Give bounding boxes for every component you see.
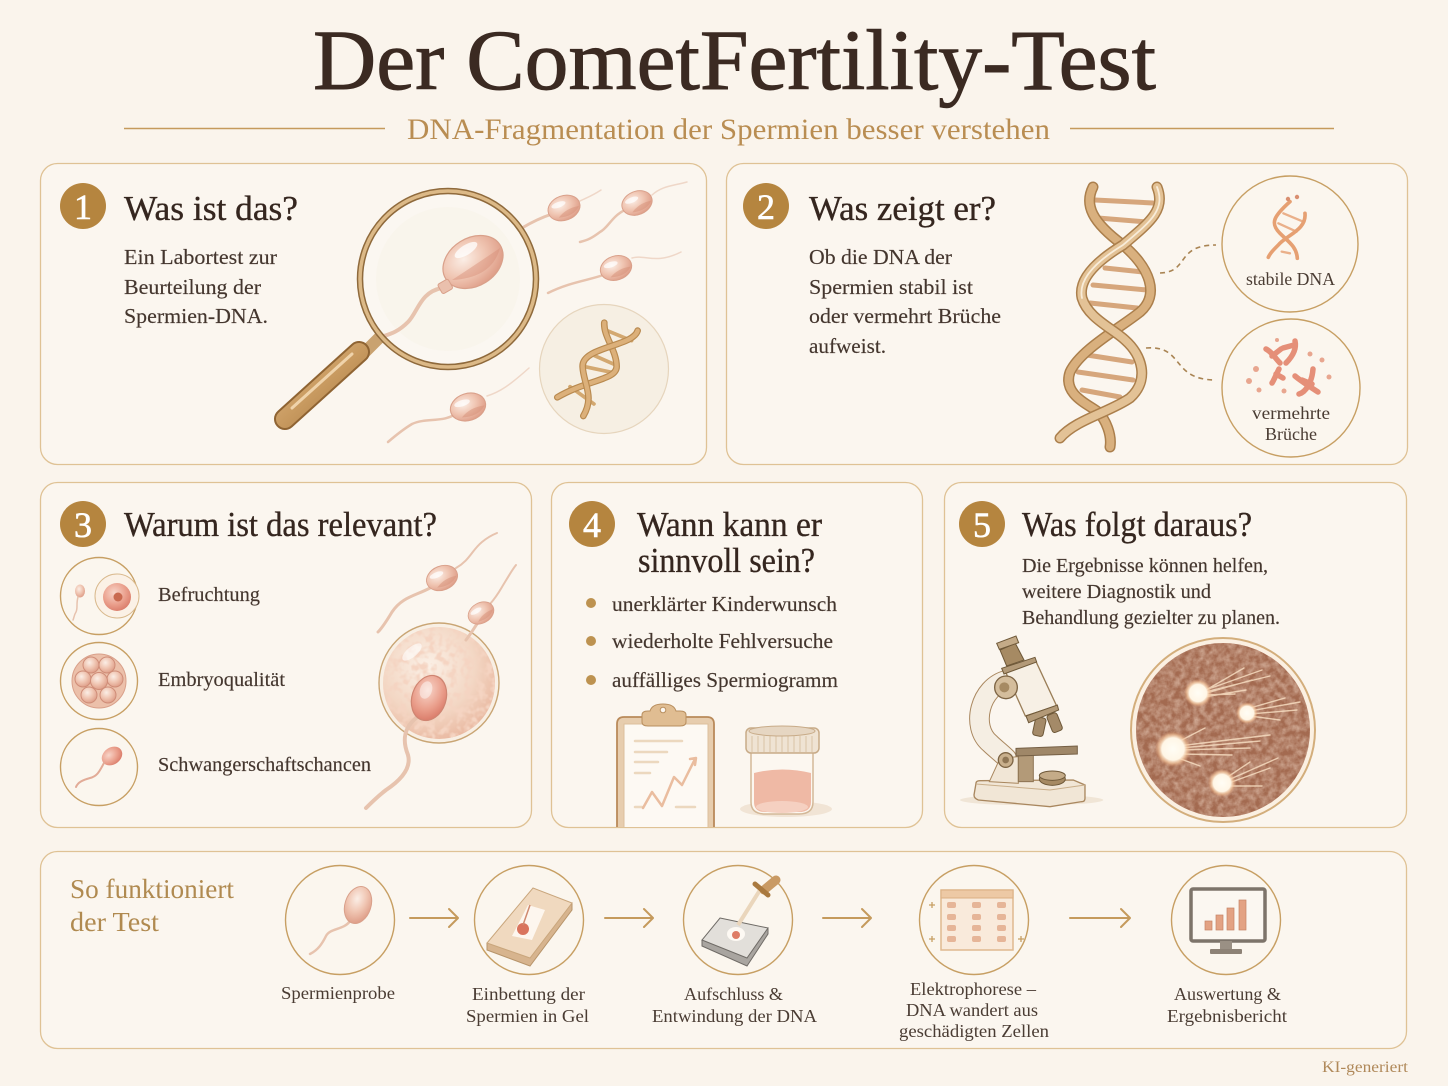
heading: So funktioniert der Test: So funktioniert [70,874,234,904]
step 5: Auswertung und Ergebnisbericht: Ergebnisbericht [1167,1006,1287,1026]
title: Der CometFertility-Test [313,12,1156,108]
step 4: Elektrophorese: DNA wandert aus [906,1000,1038,1020]
bullet list [586,592,838,692]
panel: Was folgt daraus? [944,482,1406,828]
body text 2: Spermien stabil ist [809,275,973,299]
number badge 2 [743,183,789,229]
step 3: Aufschluss und Entwindung der DNA [652,866,817,1026]
step 4: Elektrophorese: geschädigten Zellen [899,1021,1049,1041]
bullet list: wiederholte Fehlversuche [612,629,833,653]
number badge 3 [60,501,106,547]
heading 3: Warum ist das relevant? [124,505,437,544]
number badge 3: 3 [74,505,92,545]
body text 5: Die Ergebnisse können helfen, [1022,555,1268,577]
arrow 2 [605,909,653,927]
subtitle: DNA-Fragmentation der Spermien besser verstehen [407,113,1050,146]
panel: Was zeigt er? [726,164,1408,464]
label: Schwangerschaftschancen: Schwangerschaftschancen [158,754,371,776]
step 5: Auswertung und Ergebnisbericht: Auswertung & [1174,984,1281,1004]
connector: stabile DNA [1160,245,1216,273]
step 4: Elektrophorese [899,866,1049,1041]
body text 1: Beurteilung der [124,275,261,299]
number badge 1 [60,183,106,229]
icon: Schwangerschaftschancen [60,728,138,806]
number badge 2: 2 [757,187,775,227]
body text 1: Spermien-DNA. [124,304,268,328]
icon: Embryoqualität [60,642,138,720]
number badge 4: 4 [583,505,601,545]
body text 2 [809,245,1001,358]
icon: Befruchtung [60,558,139,634]
heading 1: Was ist das? [124,189,298,228]
bullet list: auffälliges Spermiogramm [612,668,838,692]
arrow 4 [1070,909,1130,927]
body text 1 [124,245,277,328]
icon: background sperm cells [388,182,687,442]
credit note: KI-generiert [1322,1059,1409,1076]
heading 2: Was zeigt er? [809,189,996,228]
heading 4 [637,505,822,580]
callout: vermehrte Brüche [1222,319,1360,457]
step 5: Auswertung und Ergebnisbericht [1167,866,1287,1026]
step 1: Spermienprobe [281,866,395,1003]
heading 5: Was folgt daraus? [1022,505,1252,544]
icon: comet assay microscope image [1131,638,1315,822]
body text 5: weitere Diagnostik und [1022,581,1211,603]
panel: Warum ist das relevant? [40,482,532,828]
step 2: Einbettung der Spermien in Gel [466,866,589,1026]
heading 4: Wann kann er [637,505,822,544]
icon: DNA in circle [540,304,668,434]
heading: So funktioniert der Test: der Test [70,907,160,937]
step 3: Aufschluss und Entwindung der DNA: Aufschluss & [684,984,783,1004]
arrow 3 [823,909,871,927]
body text 2: oder vermehrt Brüche [809,304,1001,328]
step 3: Aufschluss und Entwindung der DNA: Entwindung der DNA [652,1006,817,1026]
icon: egg with sperm [366,533,516,808]
panel: So funktioniert der Test [40,852,1406,1048]
step 2: Einbettung der Spermien in Gel: Spermien in Gel [466,1006,589,1026]
step 4: Elektrophorese: Elektrophorese – [910,979,1037,999]
arrow 1 [410,909,458,927]
body text 5: Behandlung gezielter zu planen. [1022,607,1280,629]
heading 4: sinnvoll sein? [638,541,815,580]
icon: magnifying glass with sperm [285,191,536,419]
bullet list: unerklärter Kinderwunsch [612,592,838,616]
step 1: Spermienprobe: Spermienprobe [281,983,395,1003]
step 2: Einbettung der Spermien in Gel: Einbettung der [472,984,585,1004]
connector: vermehrte Brüche [1146,348,1216,380]
panel: Was ist das? [40,164,706,464]
icon: microscope [960,636,1103,807]
body text 2: Ob die DNA der [809,245,952,269]
callout: stabile DNA [1222,176,1358,312]
panel: Wann kann er sinnvoll sein? [552,482,922,844]
number badge 4 [569,501,615,547]
icon: sample jar [740,726,832,817]
icon: clipboard [617,704,714,844]
body text 5 [1022,555,1280,629]
label: Befruchtung: Befruchtung [158,584,260,606]
body text 2: aufweist. [809,334,886,358]
number badge 5 [959,501,1005,547]
icon: large DNA helix [1060,187,1160,447]
body text 1: Ein Labortest zur [124,245,277,269]
callout: vermehrte Brüche: Brüche [1265,424,1317,444]
number badge 5: 5 [973,505,991,545]
heading: So funktioniert der Test [70,874,234,937]
callout: vermehrte Brüche: vermehrte [1252,403,1330,423]
label: Embryoqualität: Embryoqualität [158,669,285,691]
number badge 1: 1 [74,187,92,227]
callout: stabile DNA: stabile DNA [1246,269,1335,289]
